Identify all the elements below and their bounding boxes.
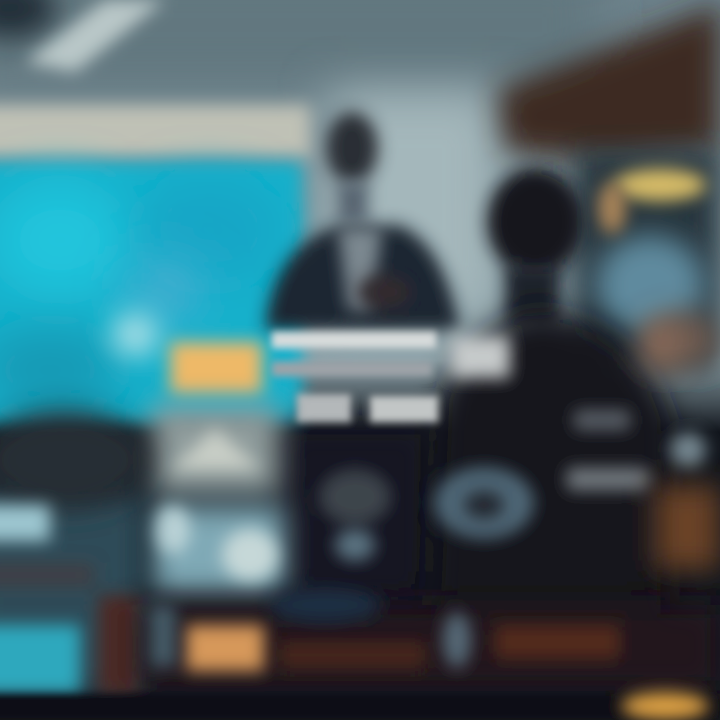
panel: cyan presentation screen	[0, 162, 302, 424]
orange highlight box	[170, 342, 262, 394]
room wall shading	[0, 0, 600, 320]
presenter figure	[265, 112, 460, 605]
desk foreground	[0, 485, 720, 720]
foreground silhouette left	[0, 410, 150, 695]
ceiling light	[25, 0, 165, 72]
glowing orange lamp	[621, 692, 709, 720]
blurred heading text blocks	[272, 332, 510, 422]
blurred side labels	[319, 410, 706, 561]
audience member silhouette	[430, 168, 680, 640]
lower left panel: white chart area	[150, 405, 285, 595]
wall band above screen	[0, 105, 310, 157]
bookshelf at right	[498, 5, 720, 370]
